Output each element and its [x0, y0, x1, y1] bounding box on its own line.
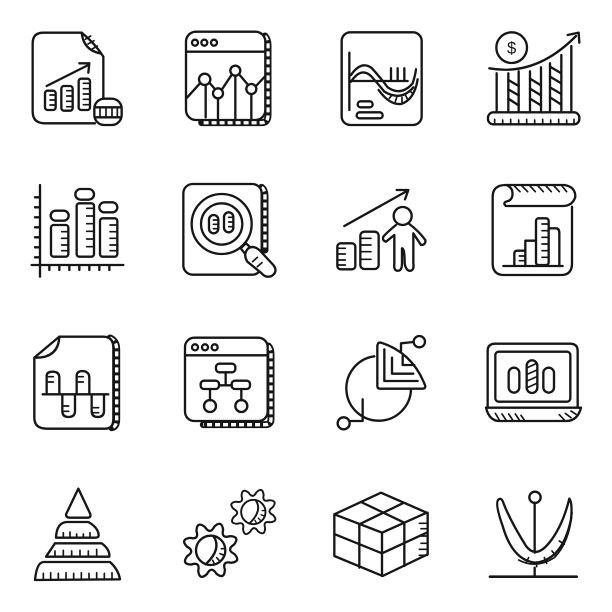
quadrant: top left icons [32, 32, 275, 277]
icon: person with growing bars [337, 190, 425, 271]
icon: bar chart with axes [32, 185, 123, 277]
quadrant: bottom left icons [34, 337, 283, 586]
icon: pie chart with connectors [338, 336, 425, 429]
icon: laptop with chart [486, 344, 581, 421]
icon: browser line chart [186, 32, 268, 123]
icon: magnifier over report [183, 184, 275, 277]
icon: scroll with bar chart [493, 185, 575, 275]
icon: dollar growth chart [488, 32, 579, 124]
icon: wave chart panel [342, 32, 422, 125]
icon: dollar growth chart: $ [507, 39, 516, 58]
icon: stacked pyramid [35, 489, 120, 580]
icon: document with growth bars and coin [33, 33, 122, 125]
icon: bell curve on stand [490, 492, 577, 577]
icon: small gear [223, 482, 283, 542]
icon: large gear [175, 514, 247, 586]
icon: isometric cube [334, 493, 428, 576]
icon: document with up and down bars [34, 337, 117, 429]
icon: browser with flow chart [185, 338, 271, 425]
quadrant: top right icons [337, 32, 579, 275]
quadrant: bottom right icons [334, 336, 581, 577]
